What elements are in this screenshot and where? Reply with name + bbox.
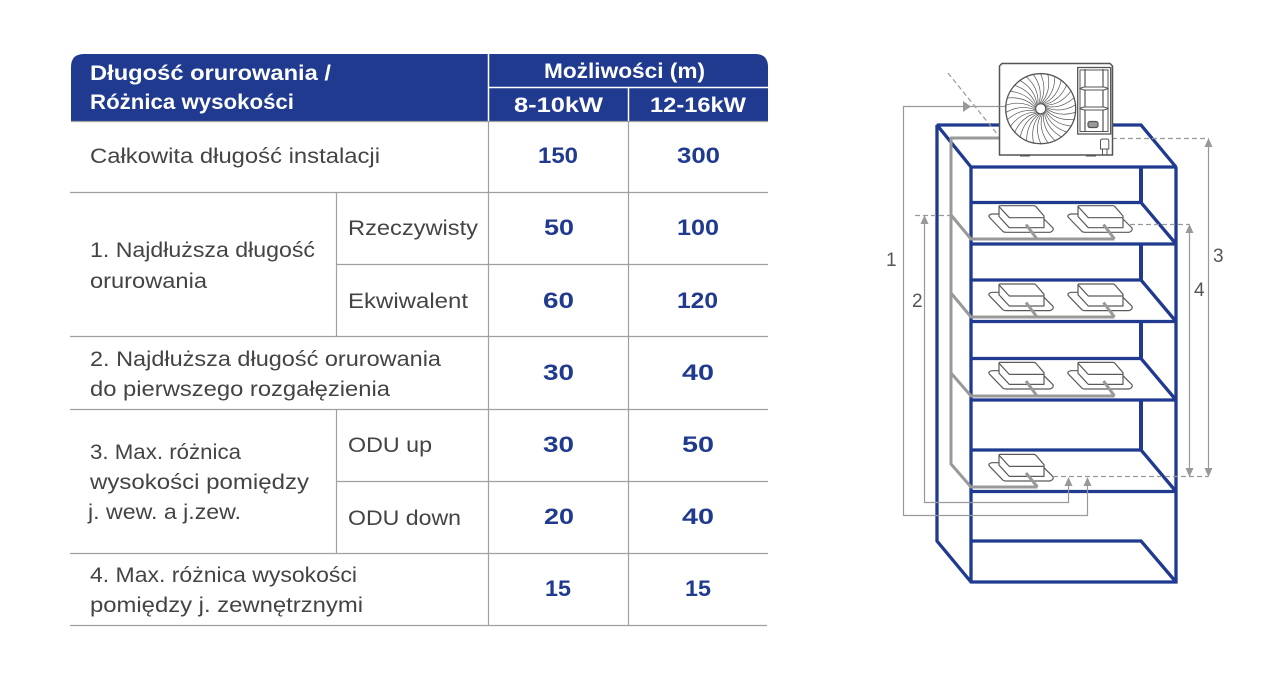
- row: total length: 150: [538, 143, 578, 168]
- row: max height difference: ODU down: [348, 507, 461, 530]
- row: longest piping: 100: [677, 215, 719, 240]
- row: max height difference: 50: [682, 432, 714, 457]
- table header: Różnica wysokości: [90, 91, 294, 114]
- outdoor unit: [1000, 64, 1112, 156]
- table header: 12-16kW: [650, 94, 746, 117]
- side panel: [1078, 68, 1111, 134]
- row: longest piping: 1. Najdłuższa długość: [90, 239, 315, 262]
- row: height between outdoor units: 4. Max. różnica wysokości: [90, 564, 357, 587]
- row: longest to first branch: 40: [682, 360, 714, 385]
- table header: Długość orurowania /: [90, 62, 331, 85]
- pipe stubs over units: [1026, 224, 1114, 487]
- dimension numbers: [886, 246, 1224, 312]
- building diagram: [886, 64, 1224, 582]
- row: longest piping: 60: [543, 288, 574, 313]
- table header: 8-10kW: [514, 94, 603, 117]
- dimension lines: [904, 73, 1212, 516]
- row: height between outdoor units: 15: [545, 576, 571, 601]
- row: max height difference: j. wew. a j.zew.: [87, 501, 241, 524]
- row: max height difference: 40: [682, 504, 714, 529]
- building frame: [937, 125, 1176, 582]
- row: longest piping: Ekwiwalent: [348, 290, 468, 313]
- fan: [1005, 73, 1076, 145]
- row: max height difference: wysokości pomiędzy: [89, 471, 310, 494]
- row: longest to first branch: [90, 348, 714, 401]
- row: height between outdoor units: 15: [685, 576, 711, 601]
- row: longest piping: orurowania: [90, 270, 207, 293]
- row: longest piping: [90, 215, 719, 313]
- dimension numbers: 3: [1213, 246, 1224, 267]
- table header: Możliwości (m): [544, 60, 705, 83]
- row: total length: Całkowita długość instalacji: [90, 145, 380, 168]
- row: max height difference: 30: [543, 432, 574, 457]
- table header: [71, 54, 768, 121]
- table: [70, 54, 768, 626]
- row: longest piping: Rzeczywisty: [348, 217, 479, 240]
- valve: [1100, 139, 1109, 154]
- row: longest to first branch: do pierwszego rozgałęzienia: [90, 378, 390, 401]
- row: total length: 300: [677, 143, 720, 168]
- row: longest to first branch: 30: [543, 360, 574, 385]
- row: max height difference: 20: [544, 504, 574, 529]
- row: longest piping: 50: [544, 215, 574, 240]
- dimension numbers: 1: [886, 250, 897, 271]
- table grid lines: [70, 121, 768, 626]
- row: max height difference: ODU up: [348, 434, 432, 457]
- row: max height difference: 3. Max. różnica: [90, 441, 241, 464]
- indoor units: [989, 206, 1132, 481]
- dimension numbers: 2: [912, 291, 923, 312]
- row: total length: [90, 143, 720, 168]
- row: max height difference: [87, 432, 714, 530]
- refrigerant piping: [951, 138, 1114, 487]
- row: longest piping: 120: [677, 288, 718, 313]
- row: height between outdoor units: [90, 564, 711, 617]
- row: height between outdoor units: pomiędzy j. zewnętrznymi: [90, 594, 363, 617]
- dimension numbers: 4: [1194, 280, 1205, 301]
- row: longest to first branch: 2. Najdłuższa długość orurowania: [90, 348, 441, 371]
